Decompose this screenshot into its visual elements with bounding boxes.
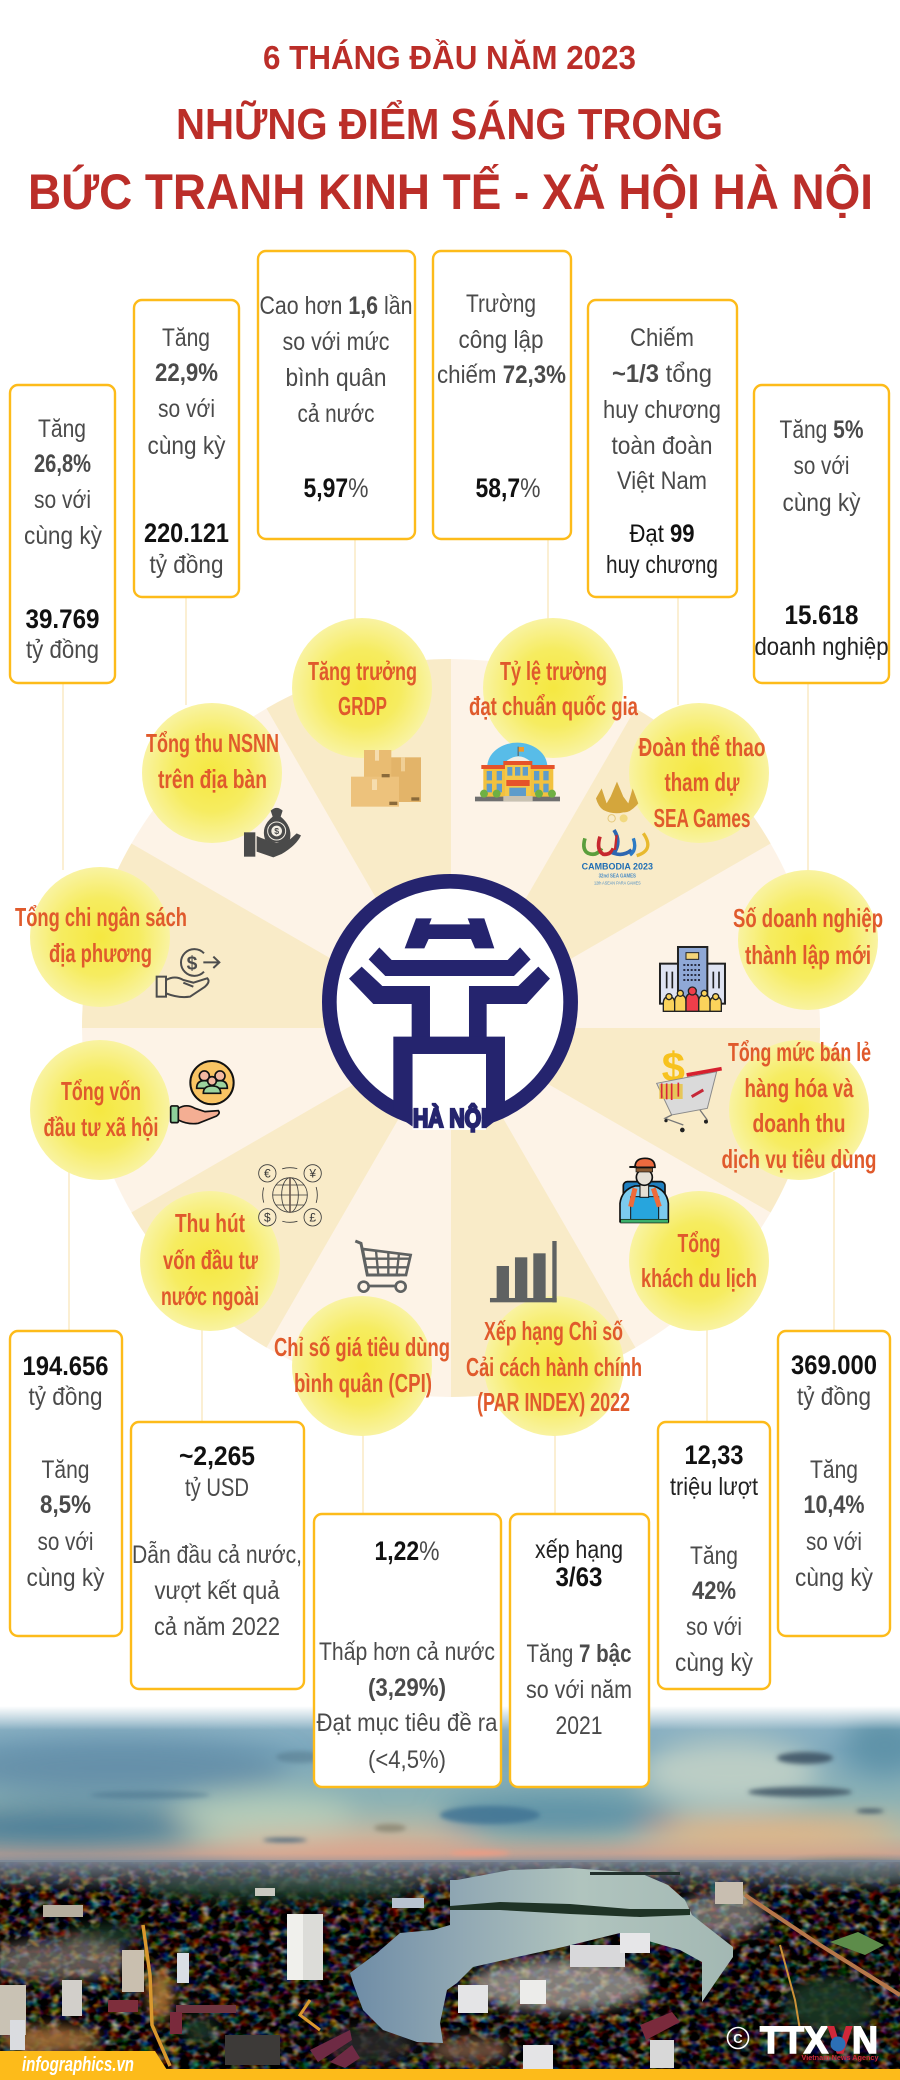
bubble: CPI: bình quân (CPI) [294,1368,432,1398]
bubble: SEA Games delegation: tham dự [664,767,740,797]
panel: tourists [658,1422,770,1689]
bubble: standard schools: Tỷ lệ trường [500,656,607,686]
icon: globe with currencies [259,1165,321,1226]
bubble: state budget revenue: Tổng thu NSNN [146,728,279,758]
emblem: right arm [469,967,550,1038]
icon: globe with currencies: $ [264,1211,271,1225]
emblem: gate [393,1037,505,1128]
bubble: SEA Games delegation: SEA Games [654,803,750,833]
panel: state revenue [134,300,239,597]
panel: foreign investment: ~2,265 [179,1441,255,1471]
bubble: GRDP growth: GRDP [338,691,387,721]
bubble: retail sales [722,1037,876,1180]
bubble: local budget spending: Tổng chi ngân sách [15,902,187,932]
panel: local budget spending: cùng kỳ [24,522,102,550]
panel: GRDP: so với mức [282,328,390,356]
bottom yellow bar [0,2069,900,2080]
panel: GRDP: 5,97% [304,473,368,503]
icon: globe with currencies: € [264,1167,271,1181]
panel: local budget spending [10,385,115,683]
panel: SEA Games: ~1/3 tổng [612,360,712,388]
panel: new enterprises: so với [794,452,850,480]
title: 6 THÁNG ĐẦU NĂM 2023 [263,39,636,76]
panel: PAR index: 3/63 [556,1562,602,1592]
bubble: total tourists: Tổng [678,1228,720,1258]
logo: TTXVN: C [733,2031,743,2046]
icon: building with people [660,947,725,1011]
panel: local budget spending: tỷ đồng [26,636,99,664]
panel: national standard schools: chiếm 72,3% [437,361,566,389]
panel: state revenue: Tăng [162,324,210,352]
panel: foreign investment: cả năm 2022 [154,1613,280,1641]
panel: national standard schools: 58,7% [476,473,540,503]
panel: local budget spending: 26,8% [34,450,91,478]
panel: tourists: 12,33 [684,1440,744,1470]
panel: PAR index [510,1514,649,1787]
panel: new enterprises [754,385,889,683]
bubble: GRDP growth: Tăng trưởng [308,656,417,686]
bubble: new enterprises [733,870,883,1010]
bubble: PAR index: Xếp hạng Chỉ số [484,1316,623,1346]
icon: SEA Games Cambodia 2023 logo: CAMBODIA 2023 [582,861,653,871]
icon: SEA Games Cambodia 2023 logo: 12th ASEAN PARA GAMES [594,881,641,886]
bubble: foreign investment: nước ngoài [161,1281,259,1311]
logo: TTXVN: Vietnam News Agency [802,2055,879,2062]
panel: tourists: so với [686,1613,742,1641]
panel: SEA Games: toàn đoàn [612,432,712,460]
icon: cardboard boxes [351,750,421,807]
logo: TTXVN: TTXVN [760,2020,878,2062]
icon: hand holding money bag [244,808,301,857]
panel: tourists: Tăng [690,1542,738,1570]
panel: new enterprises: cùng kỳ [782,489,861,517]
panel: tourists: 42% [692,1577,736,1605]
bubble: standard schools [469,618,638,758]
icon: shopping cart [355,1241,411,1292]
connector lines [63,539,834,1514]
panel: national standard schools [433,251,571,539]
panel: local budget spending: Tăng [38,415,86,443]
panel: SEA Games: huy chương [606,551,718,579]
bubble: CPI [274,1296,450,1436]
bubble: state budget revenue [142,703,282,843]
panel: state revenue: so với [158,395,215,423]
bubble: foreign investment: Thu hút [175,1208,245,1238]
panel: SEA Games: Chiếm [630,324,694,352]
panel: CPI: 1,22% [374,1536,440,1566]
panel: foreign investment: vượt kết quả [154,1577,280,1605]
panel: tourists: cùng kỳ [675,1649,753,1677]
panel: foreign investment: tỷ USD [185,1474,249,1502]
bubble: social investment: đầu tư xã hội [44,1112,158,1142]
panel: foreign investment: Dẫn đầu cả nước, [132,1540,302,1569]
panel: new enterprises: Tăng 5% [780,416,864,444]
panel: foreign investment [131,1422,304,1689]
panel: social investment: 194.656 [22,1351,108,1381]
panel: state revenue: cùng kỳ [148,432,226,460]
panel: national standard schools: Trường [466,290,536,318]
bubble: local budget spending: địa phương [49,938,152,968]
panel: state revenue: tỷ đồng [150,551,224,579]
panel: CPI: (<4,5%) [368,1746,446,1774]
icon: shopping cart with dollar [657,1044,722,1132]
icon: tourist with backpack [620,1158,668,1223]
photo: Hanoi skyline panorama [0,1700,900,2072]
bubble: retail sales: doanh thu [752,1108,846,1138]
panel: CPI: Đạt mục tiêu đề ra [316,1709,498,1737]
bubble: CPI: Chỉ số giá tiêu dùng [274,1332,450,1362]
bubble: GRDP growth [292,618,432,758]
panel: national standard schools: công lập [458,326,544,354]
panel: retail: Tăng [810,1456,858,1484]
bubble: foreign investment [140,1191,280,1331]
panel: CPI: Thấp hơn cả nước [319,1638,495,1666]
title: NHỮNG ĐIỂM SÁNG TRONG [176,98,723,149]
bubble: social investment: Tổng vốn [61,1076,141,1106]
panel: new enterprises: 15.618 [784,600,858,630]
emblem: left arm [349,967,430,1038]
emblem: curved roof [369,947,531,976]
bubble: state budget revenue: trên địa bàn [158,764,267,794]
panel: CPI: (3,29%) [368,1674,446,1702]
icon: globe with currencies: £ [309,1211,316,1225]
panel: social investment: 8,5% [40,1491,91,1519]
panel: state revenue: 22,9% [155,359,218,387]
panel: CPI [314,1514,501,1787]
website tab: infographics.vn [22,2054,134,2076]
icon: school [475,743,560,801]
icon: hand giving dollar [157,949,219,997]
panel: social investment [10,1331,122,1636]
logo: Hanoi emblem [329,881,571,1133]
bubble: PAR index: Cải cách hành chính [466,1352,642,1382]
icon: hand giving dollar: $ [187,953,198,974]
panel: social investment: tỷ đồng [28,1383,102,1411]
bubble: foreign investment: vốn đầu tư [163,1245,258,1275]
panel: retail: 369.000 [791,1350,877,1380]
panel: retail: 10,4% [804,1491,864,1519]
panel: PAR index: xếp hạng [535,1536,623,1564]
panel: PAR index: so với năm [526,1676,632,1704]
sunburst wheel [82,659,820,1397]
icon: SEA Games Cambodia 2023 logo [582,782,653,886]
bubble: total tourists: khách du lịch [641,1263,757,1293]
panel: SEA Games: Đạt 99 [630,520,694,548]
bubble: retail sales: hàng hóa và [744,1073,854,1103]
panel: retail: cùng kỳ [795,1564,873,1592]
bubble: local budget spending [15,867,187,1007]
panel: SEA Games [588,300,737,597]
icon: globe with currencies: ¥ [308,1167,316,1181]
icon: hand with people [171,1061,234,1124]
panel: tourists: triệu lượt [670,1473,758,1501]
emblem: Hanoi text: HÀ NỘI [413,1103,487,1133]
panel: social investment: so với [38,1528,94,1556]
icon: SEA Games Cambodia 2023 logo: 32nd SEA GAMES [599,874,636,880]
icon: hand holding money bag: $ [274,826,279,836]
panel: social investment: Tăng [42,1456,90,1484]
bubble: SEA Games delegation: Đoàn thể thao [638,732,766,762]
panel: retail: tỷ đồng [797,1383,871,1411]
bubble: total tourists [629,1191,769,1331]
bubble: SEA Games delegation [629,703,769,843]
panel: local budget spending: so với [34,486,91,514]
panel: GRDP: Cao hơn 1,6 lần [260,292,412,320]
panel: retail [778,1331,890,1636]
panel: GRDP [258,251,415,539]
panel: social investment: cùng kỳ [26,1564,105,1592]
panel: local budget spending: 39.769 [26,604,100,634]
bubble: social investment [30,1040,170,1180]
panel: GRDP: cả nước [298,400,374,428]
bubble: PAR index [466,1296,642,1436]
panel: retail: so với [806,1528,862,1556]
bubble: standard schools: đạt chuẩn quốc gia [469,691,638,721]
panel: PAR index: Tăng 7 bậc [526,1640,632,1668]
emblem: roof top piece [405,918,494,948]
icon: shopping cart with dollar: $ [662,1044,685,1091]
panel: GRDP: bình quân [286,364,386,392]
panel: state revenue: 220.121 [144,518,229,548]
panel: SEA Games: huy chương [603,396,721,424]
bubble: PAR index: (PAR INDEX) 2022 [477,1387,630,1417]
panel: SEA Games: Việt Nam [617,467,707,495]
panel: PAR index: 2021 [556,1712,602,1740]
icon: bar chart [490,1241,557,1302]
title [28,39,873,220]
